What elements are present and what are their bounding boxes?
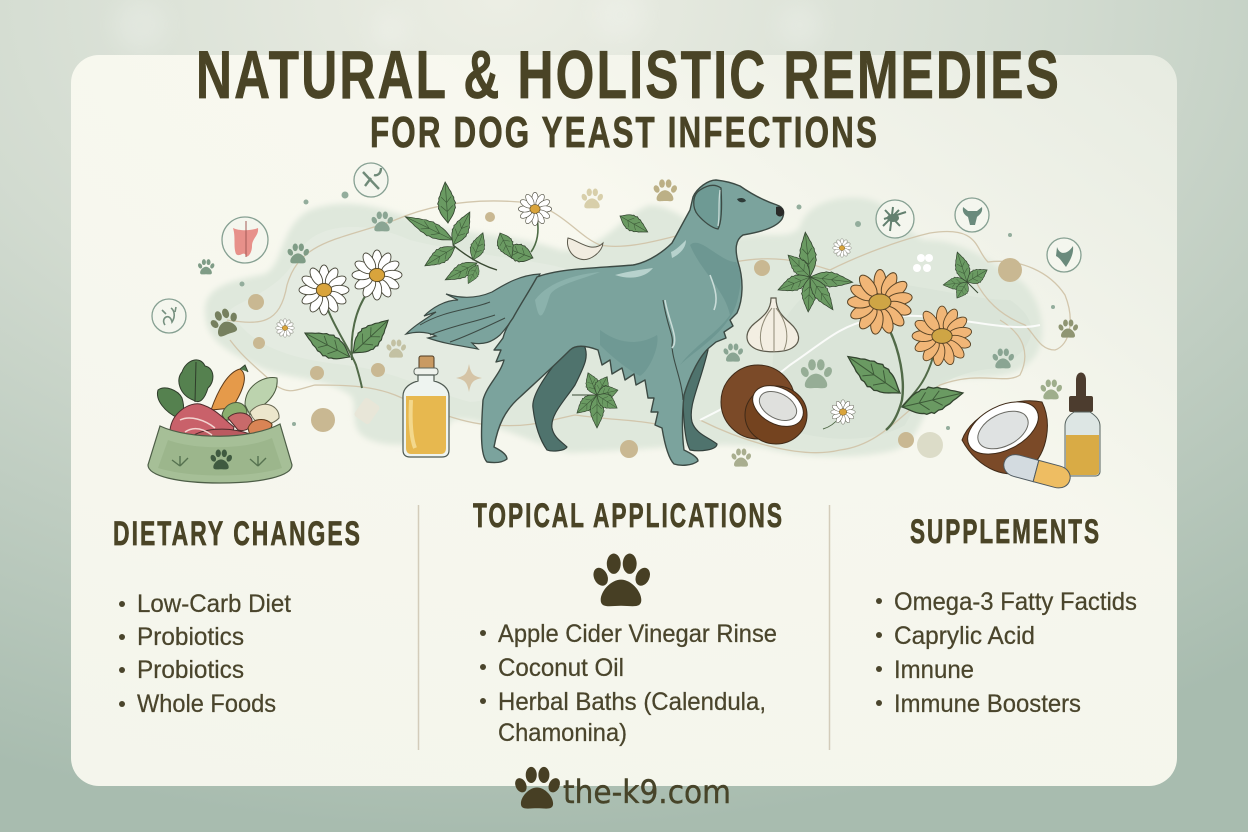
illustration: tiny daisy	[276, 319, 294, 337]
nose	[776, 206, 784, 216]
eye	[737, 198, 746, 202]
illustration: dog	[406, 180, 784, 465]
bullet list: Whole Foods	[137, 690, 276, 718]
illustration: chamomile flowers	[299, 250, 402, 388]
icon: animal silhouette circle	[1047, 238, 1081, 272]
icon: sprout circle	[152, 299, 186, 333]
bullet list: Imnune	[894, 656, 974, 684]
bullet list: Low-Carb Diet	[137, 590, 291, 618]
small paw prints	[197, 179, 1079, 467]
bullet list	[876, 588, 1137, 718]
circular icons	[152, 163, 1081, 333]
illustration: right-of-dog leaves	[775, 231, 854, 314]
heading: TOPICAL APPLICATIONS	[473, 497, 784, 535]
illustration: oil bottle	[403, 356, 449, 457]
decorative connecting lines	[227, 201, 1070, 453]
column: topical applications	[473, 497, 784, 747]
illustration: small leaf	[616, 209, 652, 239]
illustration: large coconut	[959, 391, 1047, 474]
bullet list: Chamonina)	[498, 719, 627, 747]
background bokeh lights	[114, 0, 822, 51]
bullet list: Probiotics	[137, 623, 244, 651]
illustration: under-dog sprig	[572, 370, 621, 428]
far hind leg	[533, 343, 586, 451]
bullet list: Caprylic Acid	[894, 622, 1035, 650]
icon: footer paw	[513, 767, 562, 809]
vegetables and meat	[157, 360, 279, 440]
illustration: green watercolor cloud	[205, 197, 1042, 457]
icon: paw	[591, 554, 653, 606]
bullet list: Apple Cider Vinegar Rinse	[498, 620, 777, 648]
divider right	[828, 505, 830, 750]
icon: herbs circle	[354, 163, 388, 197]
heading: DIETARY CHANGES	[113, 515, 362, 553]
bullet list	[119, 590, 291, 718]
bullet list: Immune Boosters	[894, 690, 1081, 718]
tan dots	[240, 192, 1055, 458]
illustration: tiny daisy low	[823, 400, 855, 429]
title	[196, 37, 1061, 157]
illustration: capsule	[1001, 452, 1073, 491]
illustration: garlic clove	[568, 238, 603, 260]
illustration: stemmed daisy top	[518, 192, 552, 252]
bullet list	[480, 620, 777, 747]
fur and shading	[680, 243, 740, 365]
main panel	[71, 55, 1177, 786]
illustration: small coconut	[721, 365, 810, 444]
bullet list: Probiotics	[137, 656, 244, 684]
illustration: small sprig right	[942, 250, 991, 301]
bullet list: Herbal Baths (Calendula,	[498, 688, 766, 716]
ear	[694, 185, 722, 229]
divider left	[418, 505, 420, 750]
heading: SUPPLEMENTS	[910, 513, 1101, 551]
illustration: orange flowers	[840, 270, 972, 430]
illustration: dropper bottle	[1065, 372, 1100, 476]
website text: the-k9.com	[563, 773, 731, 811]
column: supplements	[876, 513, 1137, 718]
illustration: mint leaves	[493, 230, 536, 266]
footer logo	[513, 767, 731, 811]
icon: animal head circle	[955, 198, 989, 232]
illustration: garlic bulb	[747, 298, 799, 352]
far front leg	[683, 350, 717, 451]
bullet list: Coconut Oil	[498, 654, 624, 682]
illustration: tiny daisy right	[833, 239, 851, 257]
icon: stomach	[222, 217, 268, 263]
icon: insect circle	[876, 200, 914, 238]
title line 2: FOR DOG YEAST INFECTIONS	[370, 108, 879, 157]
icon: sparkle	[456, 364, 482, 392]
bullet list: Omega-3 Fatty Factids	[894, 588, 1137, 616]
body	[482, 180, 784, 465]
bowl body	[148, 424, 292, 483]
paw on bowl	[209, 449, 233, 469]
illustration: top herb branch	[402, 181, 497, 286]
illustration: food bowl	[148, 360, 292, 483]
tail	[406, 274, 540, 349]
column: dietary changes	[113, 515, 362, 718]
